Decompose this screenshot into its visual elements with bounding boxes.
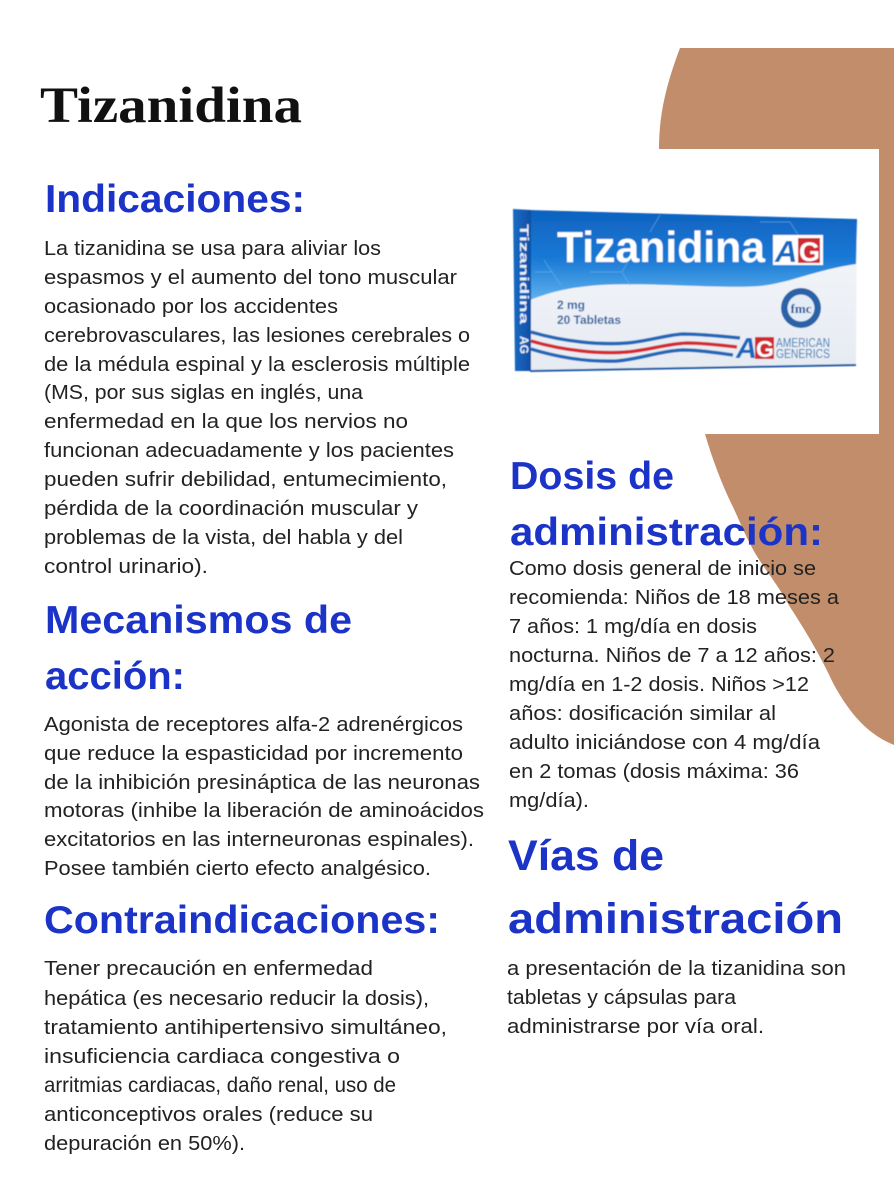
- red and blue wave stripes: [531, 332, 740, 361]
- box dose text: 20 Tabletas: [557, 313, 621, 327]
- heading: vias de administracion: Vías de: [508, 832, 664, 880]
- AG logo top: [773, 234, 823, 269]
- text block: dosis de administracion: nocturna. Niños de 7 a 12 años: 2: [509, 644, 835, 667]
- text block: mecanismos de accion: que reduce la espasticidad por incremento: [44, 742, 463, 765]
- text block: contraindicaciones: [44, 957, 447, 1155]
- text block: contraindicaciones: insuficiencia cardiaca congestiva o: [44, 1045, 400, 1068]
- text block: mecanismos de accion: [44, 713, 484, 880]
- text block: mecanismos de accion: excitatorios en las interneuronas espinales).: [44, 828, 474, 851]
- text block: contraindicaciones: hepática (es necesario reducir la dosis),: [44, 987, 429, 1010]
- text block: vias de administracion: tabletas y cápsulas para: [507, 986, 737, 1009]
- spine logo: AG: [517, 336, 531, 354]
- heading: vias de administracion: administración: [508, 895, 843, 943]
- text block: indicaciones: ocasionado por los accidentes: [44, 295, 338, 318]
- box front: [530, 210, 857, 371]
- heading: dosis de administracion: administración:: [510, 511, 823, 554]
- text block: mecanismos de accion: Agonista de receptores alfa-2 adrenérgicos: [44, 713, 463, 736]
- text block: vias de administracion: [507, 957, 846, 1038]
- american generics logo: A: [735, 333, 757, 365]
- text block: dosis de administracion: recomienda: Niños de 18 meses a: [509, 586, 840, 609]
- american generics logo: [735, 333, 830, 365]
- heading: contraindicaciones: Contraindicaciones:: [44, 899, 440, 942]
- heading: vias de administracion: [508, 832, 843, 943]
- text block: indicaciones: espasmos y el aumento del tono muscular: [44, 266, 457, 289]
- text block: indicaciones: (MS, por sus siglas en inglés, una: [44, 381, 364, 404]
- seal: [781, 288, 821, 328]
- text block: indicaciones: enfermedad en la que los nervios no: [44, 410, 408, 433]
- text block: indicaciones: pérdida de la coordinación muscular y: [44, 497, 419, 520]
- text block: contraindicaciones: arritmias cardiacas, daño renal, uso de: [44, 1073, 396, 1097]
- text block: dosis de administracion: años: dosificación similar al: [509, 702, 776, 725]
- heading: indicaciones: Indicaciones:: [45, 178, 305, 221]
- text block: dosis de administracion: mg/día).: [509, 789, 589, 812]
- hexagon pattern on band: [535, 215, 800, 285]
- panel: vias de administracion: [507, 832, 846, 1038]
- text block: dosis de administracion: 7 años: 1 mg/día en dosis: [509, 615, 757, 638]
- box spine: [513, 209, 531, 371]
- panel: dosis de administracion: [509, 455, 840, 812]
- spine label: Tizanidina: [517, 224, 531, 325]
- panel: contraindicaciones: [44, 899, 447, 1155]
- text block: indicaciones: cerebrovasculares, las lesiones cerebrales o: [44, 324, 470, 347]
- american generics logo: GENERICS: [776, 346, 830, 361]
- text block: dosis de administracion: en 2 tomas (dosis máxima: 36: [509, 760, 799, 783]
- text block: dosis de administracion: [509, 557, 840, 812]
- heading: mecanismos de accion: Mecanismos de: [45, 599, 352, 642]
- text block: contraindicaciones: depuración en 50%).: [44, 1132, 245, 1155]
- text block: contraindicaciones: tratamiento antihipertensivo simultáneo,: [44, 1016, 447, 1039]
- text block: dosis de administracion: adulto iniciándose con 4 mg/día: [509, 731, 821, 754]
- text block: vias de administracion: a presentación de la tizanidina son: [507, 957, 846, 980]
- text block: indicaciones: [44, 237, 470, 578]
- text block: dosis de administracion: Como dosis general de inicio se: [509, 557, 816, 580]
- text block: mecanismos de accion: de la inhibición presináptica de las neuronas: [44, 771, 480, 794]
- american generics logo: G: [756, 336, 774, 362]
- text block: indicaciones: La tizanidina se usa para aliviar los: [44, 237, 381, 260]
- photo: tizanidina medicine box: [513, 209, 857, 371]
- box blue band: [530, 210, 857, 300]
- box dose text: 2 mg: [557, 298, 585, 312]
- text block: contraindicaciones: anticonceptivos orales (reduce su: [44, 1103, 373, 1126]
- text block: indicaciones: control urinario).: [44, 555, 208, 578]
- american generics logo: AMERICAN: [776, 335, 830, 350]
- text block: indicaciones: funcionan adecuadamente y los pacientes: [44, 439, 454, 462]
- text block: dosis de administracion: mg/día en 1-2 dosis. Niños >12: [509, 673, 809, 696]
- box product name: Tizanidina: [557, 223, 766, 272]
- box bottom edge: [530, 365, 856, 371]
- text block: indicaciones: pueden sufrir debilidad, entumecimiento,: [44, 468, 447, 491]
- title: Tizanidina: [40, 78, 302, 134]
- text block: indicaciones: problemas de la vista, del habla y del: [44, 526, 403, 549]
- panel: indicaciones: [44, 178, 470, 578]
- text block: vias de administracion: administrarse por vía oral.: [507, 1015, 764, 1038]
- AG logo top: G: [799, 237, 820, 267]
- heading: mecanismos de accion: [45, 599, 352, 698]
- text block: indicaciones: de la médula espinal y la esclerosis múltiple: [44, 353, 470, 376]
- panel: mecanismos de accion: [44, 599, 484, 880]
- heading: dosis de administracion: Dosis de: [510, 455, 674, 498]
- text block: contraindicaciones: Tener precaución en enfermedad: [44, 957, 373, 980]
- text block: mecanismos de accion: motoras (inhibe la liberación de aminoácidos: [44, 799, 484, 822]
- heading: mecanismos de accion: acción:: [45, 655, 185, 698]
- seal: fmc: [791, 301, 812, 316]
- heading: dosis de administracion: [510, 455, 823, 554]
- AG logo top: A: [774, 234, 797, 269]
- text block: mecanismos de accion: Posee también cierto efecto analgésico.: [44, 857, 431, 880]
- decorative brown blob: [659, 48, 894, 745]
- box dose text: [557, 298, 621, 327]
